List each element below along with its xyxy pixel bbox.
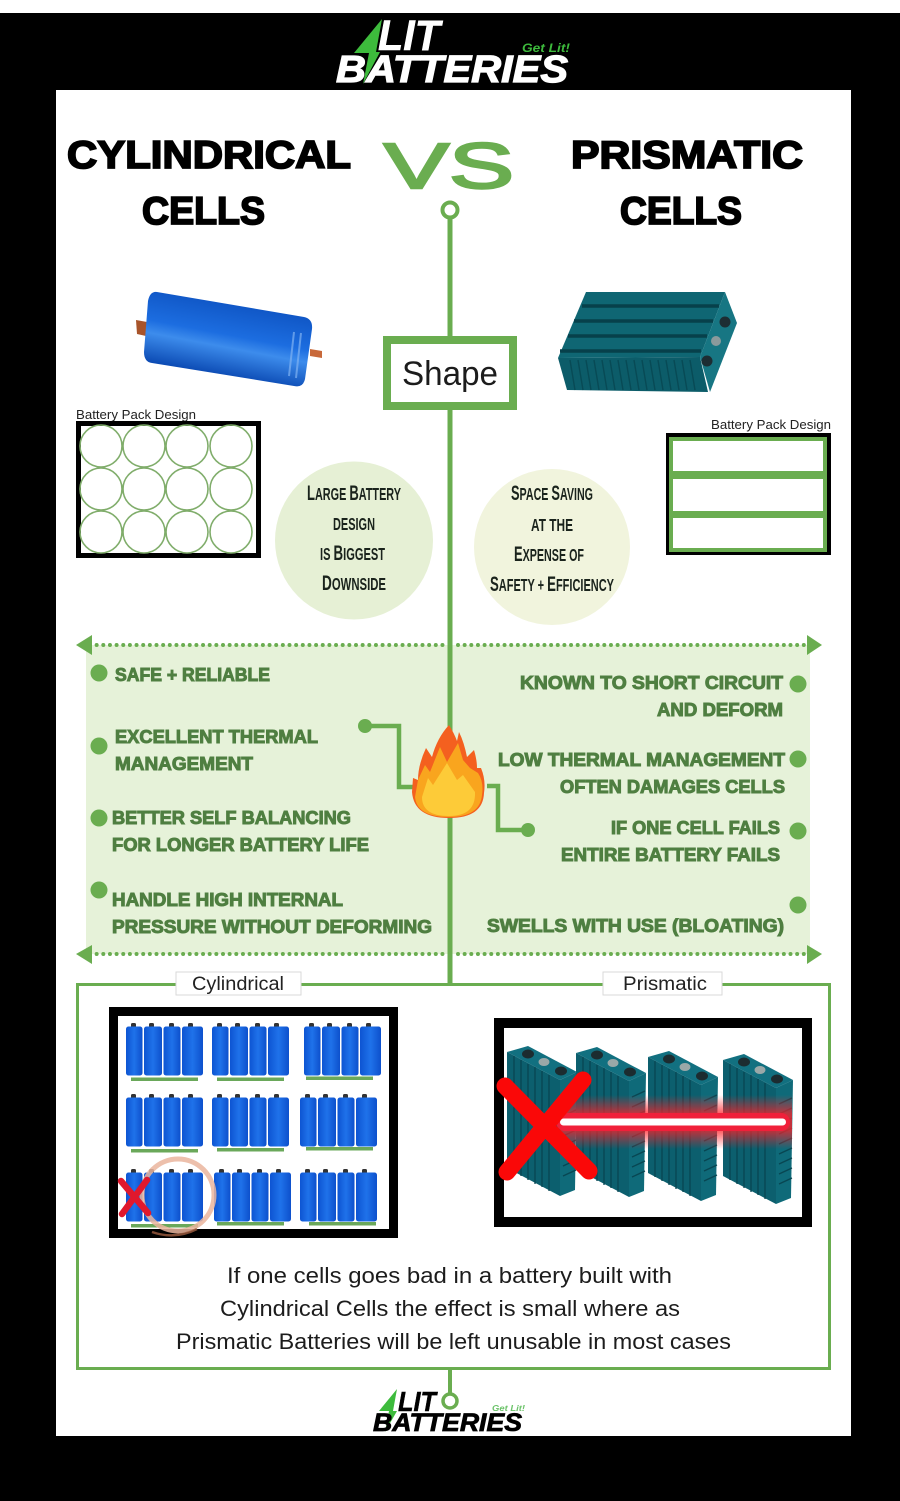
right list: disadvantages: ENTIRE BATTERY FAILS	[561, 844, 780, 865]
heading: cylindrical cells	[67, 134, 351, 233]
label: prismatic	[603, 972, 722, 995]
footer logo: Get Lit!	[492, 1404, 525, 1413]
footer logo: BATTERIES	[373, 1409, 522, 1437]
callout: large battery design: DESIGN	[333, 514, 375, 534]
heading: cylindrical cells: CYLINDRICAL	[67, 134, 351, 177]
heading: prismatic cells: CELLS	[620, 190, 742, 233]
callout: large battery design	[275, 462, 433, 620]
header logo: LIT	[378, 12, 444, 60]
callout: space saving: SPACE SAVING	[511, 482, 593, 505]
connector: left	[358, 719, 416, 787]
prismatic pack design	[668, 417, 831, 552]
heading: prismatic cells	[571, 134, 803, 233]
heading: cylindrical cells: CELLS	[142, 190, 265, 233]
header logo: Get Lit!	[522, 41, 570, 55]
icon: cylindrical cell	[136, 292, 322, 386]
left list: advantages: SAFE + RELIABLE	[115, 664, 270, 685]
panel: pros and cons background	[86, 645, 810, 954]
footer logo	[373, 1386, 525, 1437]
left list: advantages: FOR LONGER BATTERY LIFE	[112, 834, 369, 855]
right list: disadvantages: LOW THERMAL MANAGEMENT	[498, 749, 786, 770]
shape label box: Shape	[402, 355, 498, 393]
header logo	[336, 12, 570, 91]
left list: advantages	[90, 664, 432, 937]
central timeline	[442, 202, 458, 984]
right list: disadvantages: SWELLS WITH USE (BLOATING)	[487, 915, 784, 936]
callout: large battery design: LARGE BATTERY	[307, 482, 401, 505]
callout: space saving: AT THE	[531, 515, 573, 535]
panel: failure comparison	[78, 984, 830, 1368]
callout: large battery design: DOWNSIDE	[322, 572, 386, 595]
right list: disadvantages: IF ONE CELL FAILS	[611, 817, 780, 838]
header logo: BATTERIES	[336, 49, 568, 91]
image: prismatic battery pack with failed cell	[499, 1023, 807, 1222]
right list: disadvantages: KNOWN TO SHORT CIRCUIT	[520, 672, 784, 693]
prismatic pack design: Battery Pack Design	[711, 417, 831, 432]
callout: large battery design: IS BIGGEST	[320, 542, 385, 565]
shape label box	[387, 340, 513, 406]
dotted arrows	[76, 635, 822, 964]
caption text: Prismatic Batteries will be left unusable in most cases	[176, 1329, 731, 1354]
left list: advantages: BETTER SELF BALANCING	[112, 807, 351, 828]
footer logo: LIT	[398, 1386, 439, 1417]
right list: disadvantages: AND DEFORM	[657, 699, 783, 720]
cylindrical pack design	[76, 407, 258, 556]
caption text: Cylindrical Cells the effect is small where as	[220, 1296, 680, 1321]
callout: space saving: EXPENSE OF	[514, 543, 584, 566]
right list: disadvantages	[487, 672, 806, 936]
label: cylindrical	[176, 972, 301, 995]
label: cylindrical: Cylindrical	[192, 974, 284, 995]
right list: disadvantages: OFTEN DAMAGES CELLS	[560, 776, 785, 797]
cylindrical pack design: Battery Pack Design	[76, 407, 196, 422]
caption text	[176, 1263, 731, 1354]
connector: right	[487, 786, 535, 837]
top white strip	[0, 0, 900, 13]
callout: space saving	[474, 469, 630, 625]
label: prismatic: Prismatic	[623, 974, 707, 995]
callout: space saving: SAFETY + EFFICIENCY	[490, 573, 614, 596]
heading: prismatic cells: PRISMATIC	[571, 134, 803, 177]
heading: VS: VS	[384, 130, 514, 202]
white main panel	[56, 90, 851, 1436]
icon: flame	[412, 725, 485, 818]
image: cylindrical battery pack with one failed cell	[114, 1012, 394, 1235]
caption text: If one cells goes bad in a battery built with	[227, 1263, 672, 1288]
icon: prismatic cell	[558, 292, 737, 392]
left list: advantages: MANAGEMENT	[115, 753, 254, 774]
bottom connector	[443, 1369, 457, 1408]
left list: advantages: HANDLE HIGH INTERNAL	[112, 889, 343, 910]
left list: advantages: EXCELLENT THERMAL	[115, 726, 318, 747]
left list: advantages: PRESSURE WITHOUT DEFORMING	[112, 916, 432, 937]
